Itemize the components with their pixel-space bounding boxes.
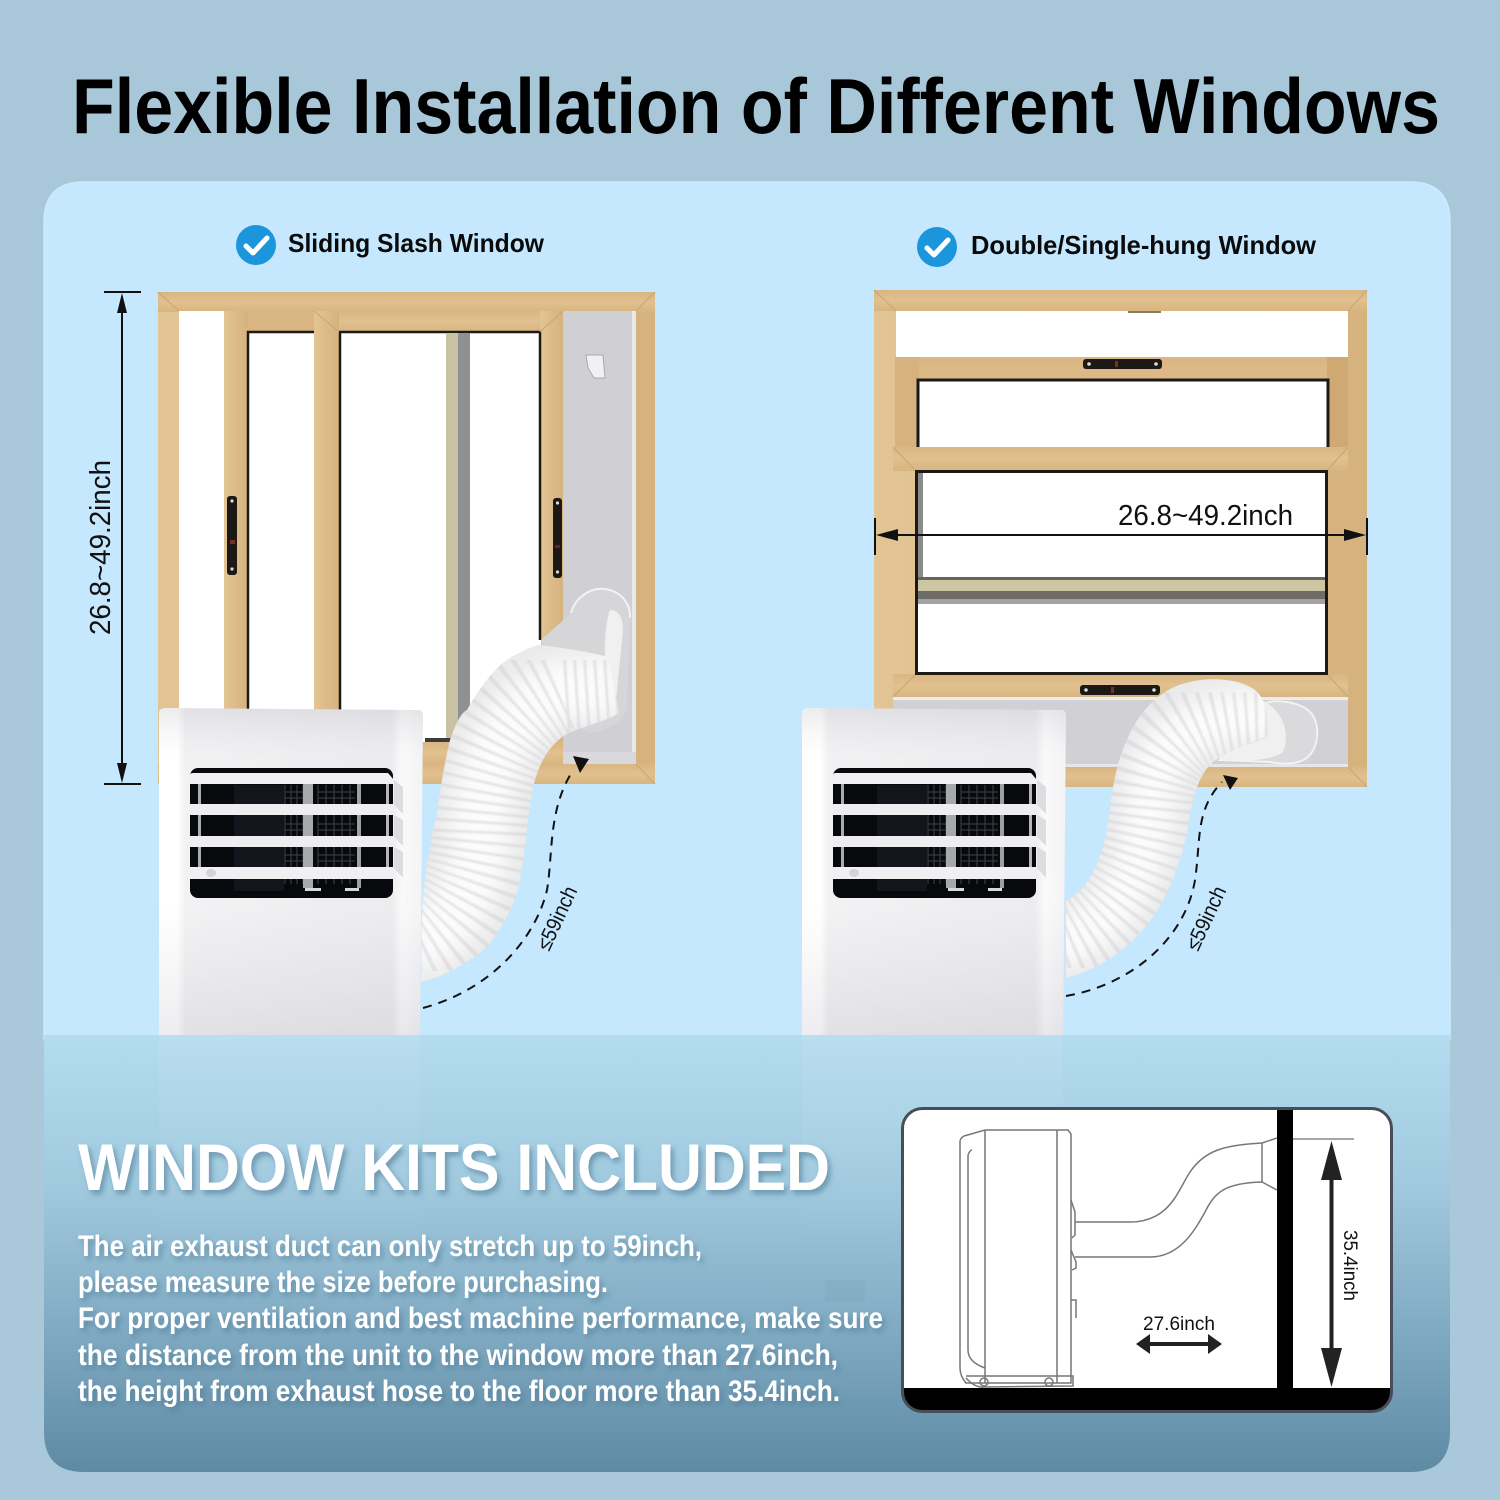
- left hose length arrow: [423, 756, 589, 1008]
- handle: lower sash: [1080, 685, 1160, 695]
- main panel: [44, 182, 1450, 1040]
- right air conditioner unit: [802, 708, 1066, 1035]
- diagram: height arrow: 35.4inch: [1339, 1230, 1360, 1301]
- heading: sliding sash window: [236, 225, 545, 265]
- handle: upper sash: [1083, 359, 1162, 369]
- body text: please measure the size before purchasing.: [78, 1266, 608, 1299]
- left exhaust hose: [421, 645, 619, 982]
- left air conditioner unit: [159, 708, 423, 1035]
- right hose length arrow: [1066, 775, 1238, 996]
- handle: left sash: [227, 496, 237, 575]
- right hose length arrow: ≤59inch: [1182, 883, 1231, 954]
- grey window kit panel: [893, 697, 1348, 767]
- body text: the height from exhaust hose to the floor more than 35.4inch.: [78, 1375, 840, 1408]
- diagram: distance arrow: [1136, 1314, 1222, 1354]
- left hose length arrow: ≤59inch: [533, 883, 582, 954]
- right hung window: [874, 290, 1367, 787]
- heading: double or single hung window: [917, 227, 1317, 267]
- body text: For proper ventilation and best machine performance, make sure: [78, 1302, 883, 1335]
- diagram: distance arrow: 27.6inch: [1143, 1314, 1215, 1335]
- heading: double or single hung window: Double/Single-hung Window: [971, 230, 1317, 260]
- heading: window kits included: WINDOW KITS INCLUDED: [78, 1130, 830, 1204]
- handle: right sash: [553, 498, 562, 578]
- right exhaust hose: [1066, 679, 1268, 978]
- left sliding window: [158, 292, 655, 784]
- installation diagram card: [902, 1108, 1392, 1412]
- lower information band: [44, 1035, 1450, 1472]
- left height dimension: 26.8~49.2inch: [85, 460, 117, 635]
- diagram: duct: [1075, 1138, 1277, 1257]
- right width dimension: 26.8~49.2inch: [1118, 500, 1293, 532]
- body text: the distance from the unit to the window more than 27.6inch,: [78, 1339, 838, 1372]
- diagram: unit side view: [960, 1130, 1076, 1387]
- left height dimension: [85, 292, 141, 784]
- right exhaust flange: [1215, 700, 1317, 764]
- hook bracket: [586, 355, 605, 378]
- right width dimension: [875, 500, 1367, 555]
- left exhaust flange: [541, 589, 630, 733]
- diagram: height arrow: [1293, 1139, 1360, 1387]
- sash lock strip: [918, 577, 1325, 604]
- body text: [78, 1230, 883, 1408]
- heading: sliding sash window: Sliding Slash Window: [288, 228, 545, 258]
- body text: The air exhaust duct can only stretch up to 59inch,: [78, 1230, 702, 1263]
